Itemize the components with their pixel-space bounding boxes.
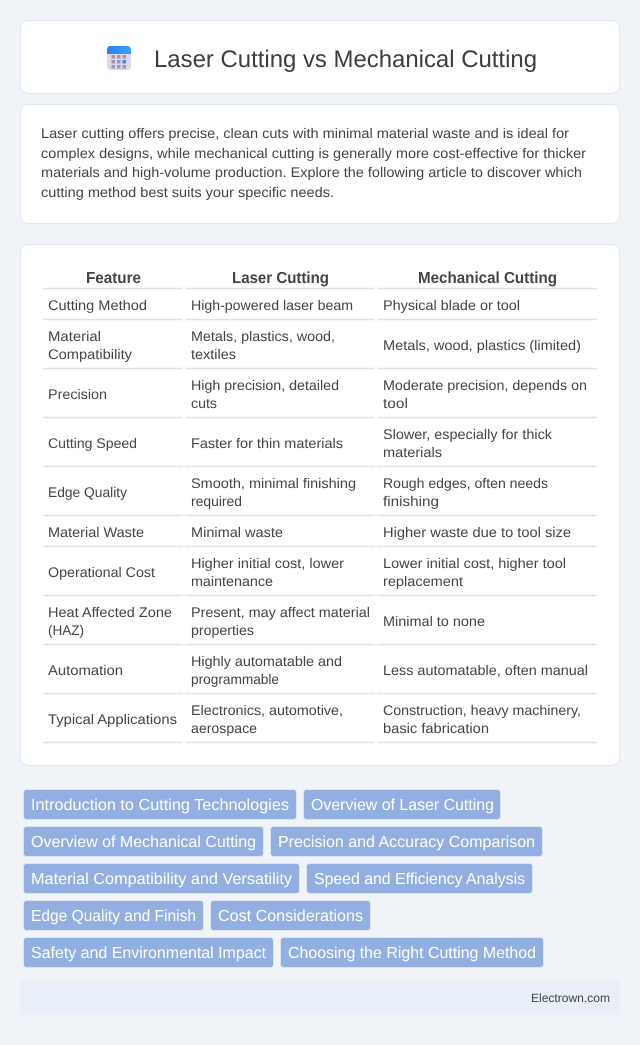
row: edge quality: Edge Quality xyxy=(48,484,127,500)
row: heat affected zone: Heat Affected Zone xyxy=(48,604,172,620)
topic tags xyxy=(24,790,544,968)
row: cutting speed xyxy=(48,426,553,460)
row: operational cost: replacement xyxy=(383,573,463,589)
row: material waste: Material Waste xyxy=(48,524,144,540)
row: heat affected zone: Present, may affect material xyxy=(191,604,370,620)
tag xyxy=(24,938,274,968)
footer xyxy=(20,981,620,1015)
table header xyxy=(86,270,557,287)
row: operational cost: Lower initial cost, higher tool xyxy=(383,555,566,571)
row: precision: Precision xyxy=(48,386,107,402)
tag: Speed and Efficiency Analysis xyxy=(314,871,525,888)
intro panel xyxy=(20,104,620,224)
row: cutting method xyxy=(48,297,520,313)
header panel xyxy=(20,20,620,94)
row: cutting speed: Cutting Speed xyxy=(48,435,137,451)
tag xyxy=(210,900,370,930)
row: heat affected zone xyxy=(48,604,485,638)
table header: Laser Cutting xyxy=(232,270,329,287)
tag xyxy=(280,938,544,968)
row: cutting speed: materials xyxy=(383,444,442,460)
row: material compatibility: Metals, wood, plastics (limited) xyxy=(383,337,581,353)
row: automation: Less automatable, often manual xyxy=(383,662,588,678)
tag xyxy=(306,864,532,894)
intro text: Laser cutting offers precise, clean cuts with minimal material waste and is ideal for xyxy=(41,125,569,141)
tag: Choosing the Right Cutting Method xyxy=(288,945,536,962)
row: operational cost: Operational Cost xyxy=(48,564,155,580)
row: typical applications xyxy=(48,702,581,736)
comparison table panel xyxy=(20,244,620,766)
row: precision: Moderate precision, depends on xyxy=(383,377,587,393)
row: material compatibility: Compatibility xyxy=(48,346,132,362)
tag xyxy=(24,790,296,820)
row: typical applications: Construction, heavy machinery, xyxy=(383,702,581,718)
row: edge quality: finishing xyxy=(383,493,439,509)
row: automation: Automation xyxy=(48,662,123,678)
tag: Material Compatibility and Versatility xyxy=(31,871,292,888)
row: automation xyxy=(48,653,588,687)
row: material waste xyxy=(48,524,571,540)
tag xyxy=(24,826,264,856)
row: operational cost: Higher initial cost, lower xyxy=(191,555,344,571)
row: material compatibility: Metals, plastics, wood, xyxy=(191,328,335,344)
tag: Edge Quality and Finish xyxy=(31,908,196,925)
tag: Precision and Accuracy Comparison xyxy=(278,834,535,851)
tag: Overview of Laser Cutting xyxy=(311,797,494,814)
tag: Introduction to Cutting Technologies xyxy=(31,797,289,814)
row: automation: Highly automatable and xyxy=(191,653,342,669)
intro text: cutting method best suits your specific needs. xyxy=(41,184,334,200)
row: cutting method: Physical blade or tool xyxy=(383,297,520,313)
tag xyxy=(24,864,300,894)
row: material compatibility: textiles xyxy=(191,346,236,362)
row: material waste: Minimal waste xyxy=(191,524,283,540)
intro text xyxy=(41,125,586,200)
row: typical applications: Typical Applications xyxy=(48,711,177,727)
tag xyxy=(304,790,500,820)
row: typical applications: aerospace xyxy=(191,720,257,736)
tag: Overview of Mechanical Cutting xyxy=(31,834,256,851)
row: operational cost: maintenance xyxy=(191,573,273,589)
footer: Electrown.com xyxy=(531,991,610,1005)
table header: Feature xyxy=(86,270,141,287)
row: typical applications: Electronics, automotive, xyxy=(191,702,343,718)
row: typical applications: basic fabrication xyxy=(383,720,489,736)
row: cutting method: Cutting Method xyxy=(48,297,147,313)
tag xyxy=(24,900,204,930)
tag: Cost Considerations xyxy=(218,908,363,925)
row: edge quality: Rough edges, often needs xyxy=(383,475,548,491)
tag xyxy=(270,826,542,856)
row: heat affected zone: Minimal to none xyxy=(383,613,485,629)
intro text: complex designs, while mechanical cutting is generally more cost-effective for thicker xyxy=(41,145,586,161)
row: operational cost xyxy=(48,555,566,589)
tag: Safety and Environmental Impact xyxy=(31,945,267,962)
row: cutting speed: Slower, especially for thick xyxy=(383,426,553,442)
intro text: materials and high-volume production. Explore the following article to discover which xyxy=(41,164,582,180)
row: material compatibility: Material xyxy=(48,328,101,344)
row: precision: tool xyxy=(383,395,408,411)
row: precision: High precision, detailed xyxy=(191,377,339,393)
table header: Mechanical Cutting xyxy=(418,270,557,287)
title: Laser Cutting vs Mechanical Cutting xyxy=(154,46,537,73)
row: automation: programmable xyxy=(191,671,279,687)
icon: calendar xyxy=(107,46,131,70)
row: heat affected zone: (HAZ) xyxy=(48,622,84,638)
row: edge quality: required xyxy=(191,493,242,509)
row: edge quality: Smooth, minimal finishing xyxy=(191,475,356,491)
row: material compatibility xyxy=(48,328,581,362)
row: cutting method: High-powered laser beam xyxy=(191,297,353,313)
row: precision xyxy=(48,377,587,411)
row: precision: cuts xyxy=(191,395,217,411)
row: edge quality xyxy=(48,475,548,509)
row: cutting speed: Faster for thin materials xyxy=(191,435,343,451)
row: material waste: Higher waste due to tool size xyxy=(383,524,571,540)
row: heat affected zone: properties xyxy=(191,622,254,638)
